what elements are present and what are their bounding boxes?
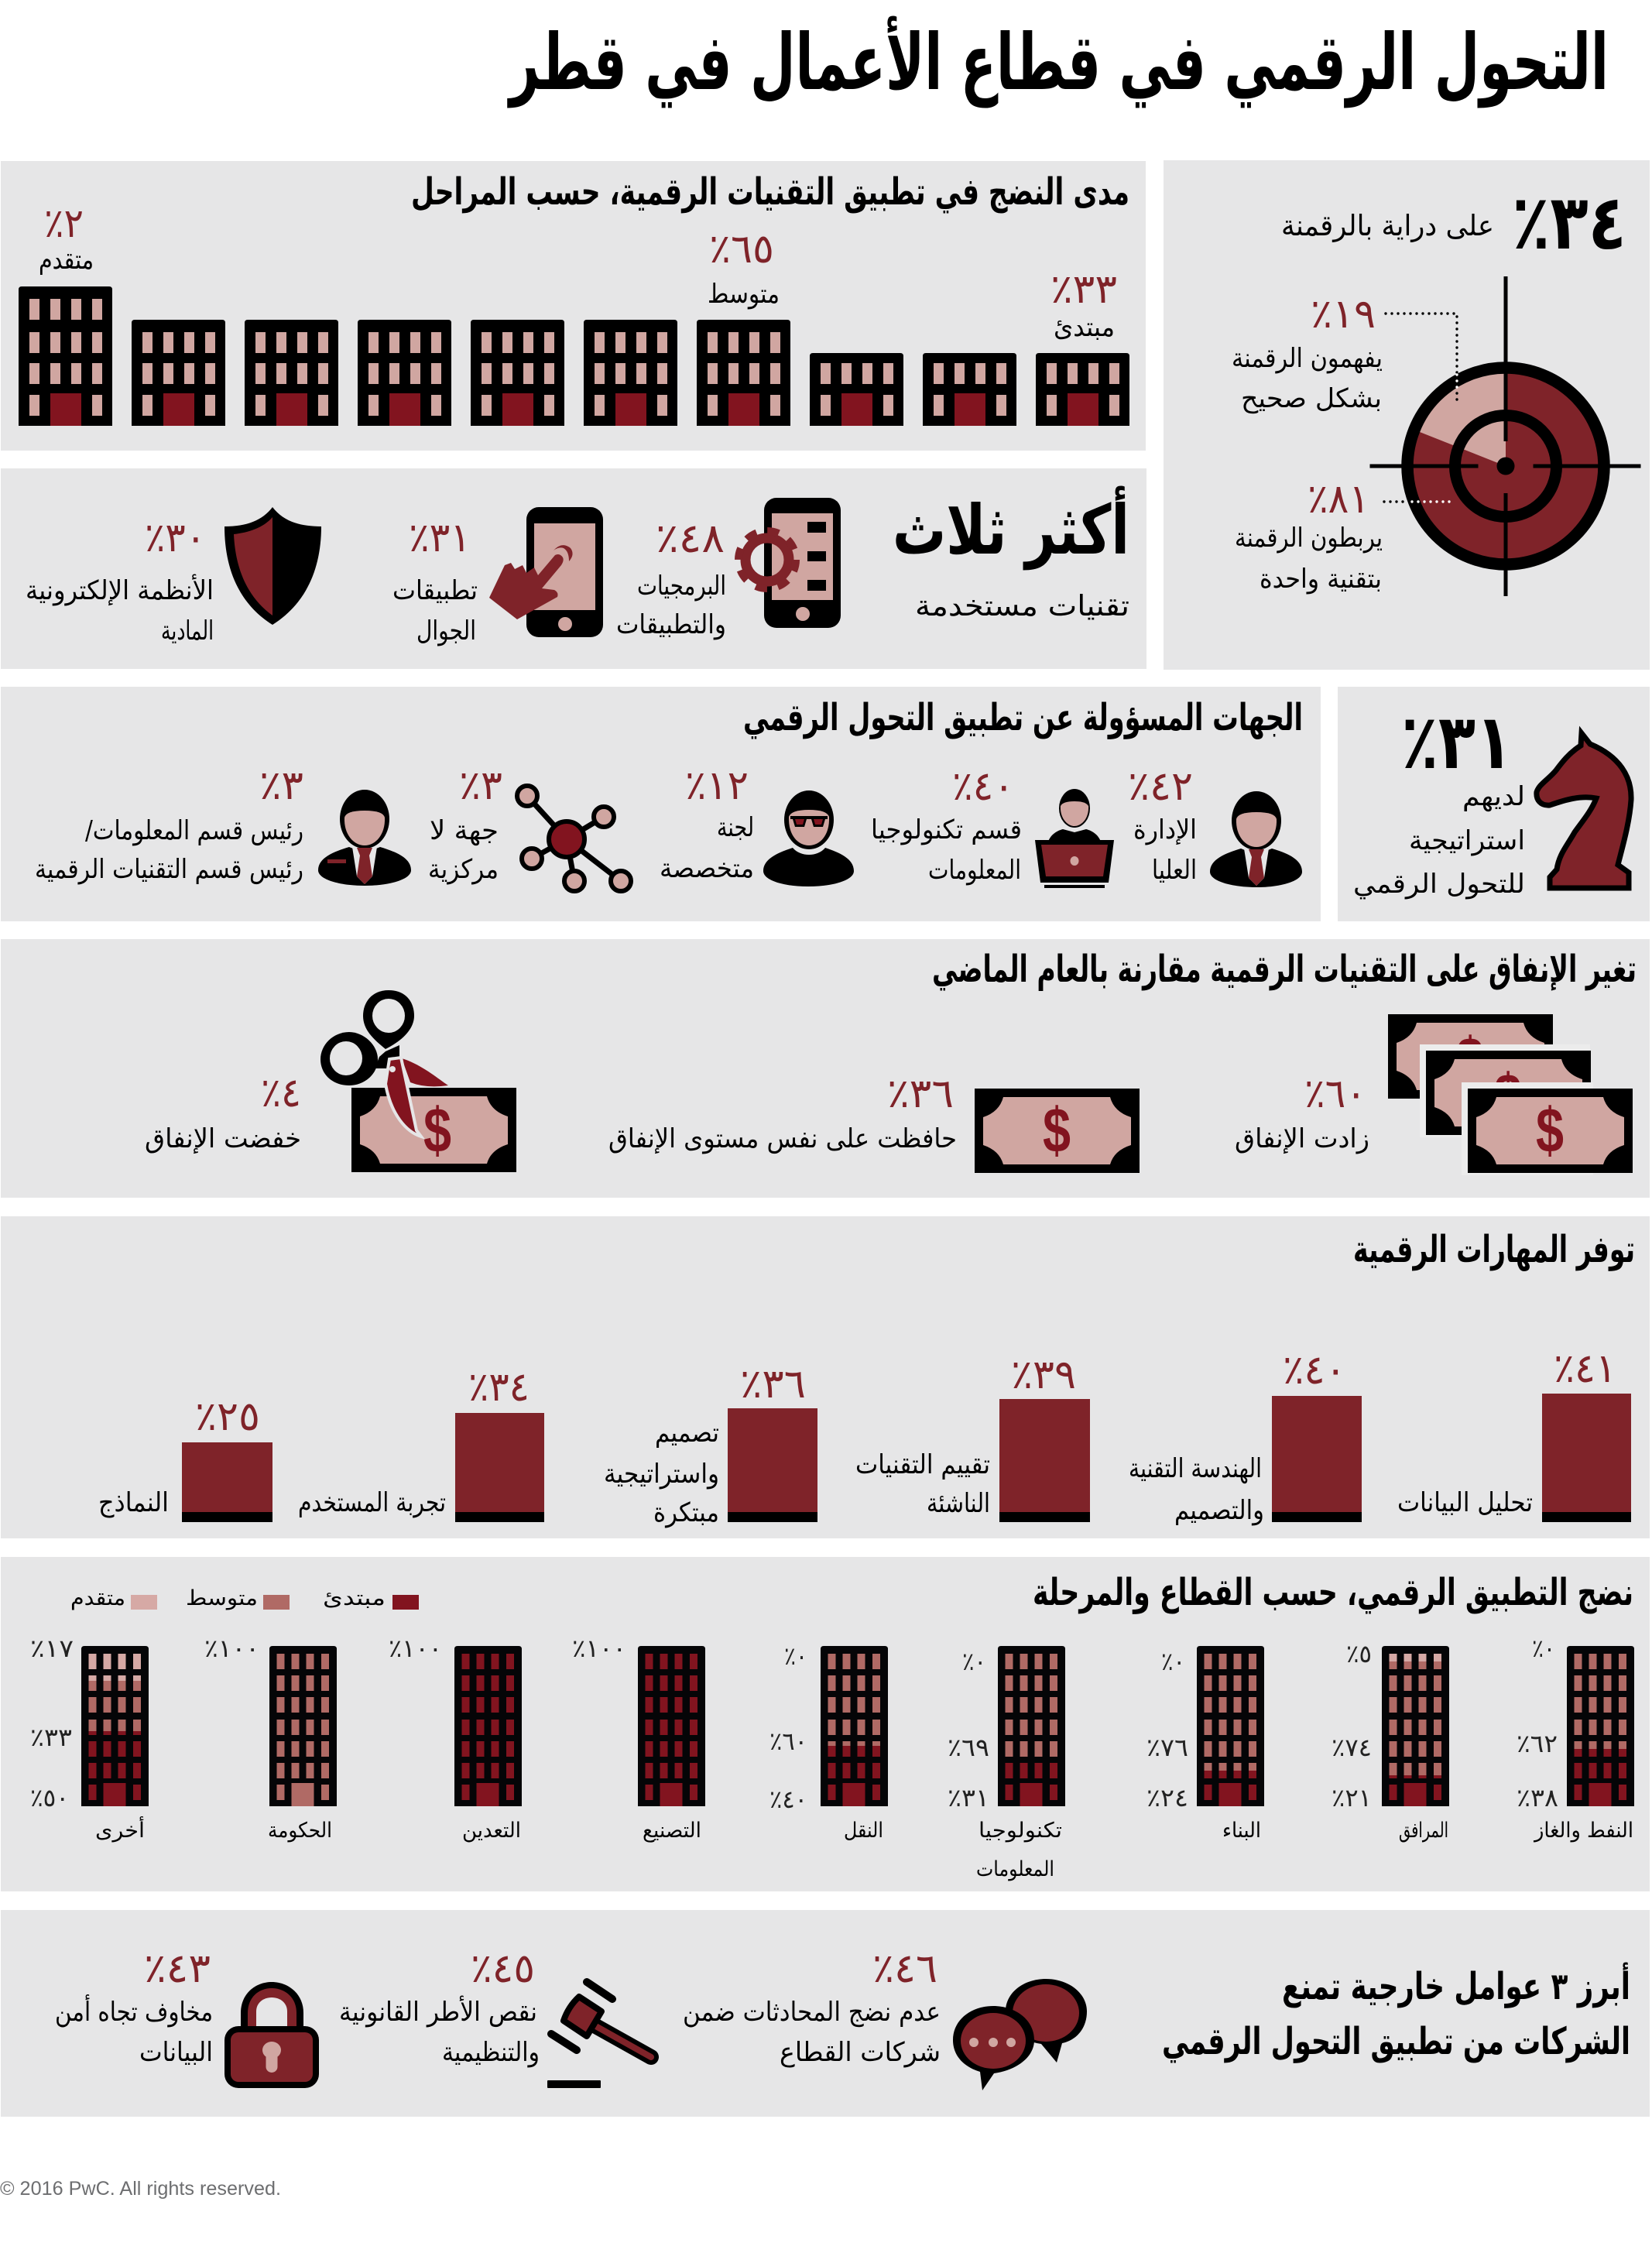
footer copyright: © 2016 PwC. All rights reserved. — [0, 2178, 281, 2200]
sector: government: الحكومة — [268, 1819, 332, 1843]
bar: user experience — [298, 1364, 544, 1522]
stat: 19 percent: يفهمون الرقمنة — [1232, 343, 1383, 374]
legend: متقدم — [70, 1586, 125, 1610]
stat: advanced: ٢٪ — [44, 201, 84, 247]
stat: IT department: ٤٠٪ — [952, 763, 1014, 810]
stat: immature sector conversations: عدم نضج المحادثات ضمن — [683, 1997, 941, 2028]
icon: scissors cutting money — [320, 990, 516, 1172]
stat: immature sector conversations: ٤٦٪ — [872, 1946, 937, 1992]
sector: transport — [769, 1641, 888, 1843]
icon: person with laptop — [1035, 789, 1114, 888]
stat: lack of legal frameworks: نقص الأطر القانونية — [339, 1995, 537, 2028]
bar: emerging tech assessment: تقييم التقنيات — [855, 1449, 990, 1480]
sector: other: ٣٣٪ — [30, 1723, 72, 1752]
stat: top management: العليا — [1152, 855, 1197, 886]
stat: decentralised: مركزية — [428, 854, 499, 885]
sector: utilities: المرافق — [1399, 1819, 1448, 1843]
icon: stacked money: $ — [1494, 1061, 1522, 1132]
stat: beginner: مبتدئ — [1054, 312, 1115, 343]
sector: oil and gas: ٣٨٪ — [1517, 1783, 1558, 1812]
text: have a strategy: للتحول الرقمي — [1353, 869, 1525, 900]
stat: specialized committee: متخصصة — [660, 853, 754, 884]
text: have a strategy: استراتيجية — [1409, 825, 1525, 856]
stat: increased spending: زادت الإنفاق — [1235, 1123, 1369, 1154]
stat: increased spending: ٦٠٪ — [1304, 1071, 1366, 1117]
panel: digital skills — [1, 1216, 1650, 1538]
sector: construction: البناء — [1222, 1819, 1261, 1843]
heading: maturity by stage: مدى النضج في تطبيق التقنيات الرقمية، حسب المراحل — [411, 170, 1129, 214]
stat: 19 percent: بشكل صحيح — [1241, 383, 1382, 414]
stat: decentralised — [428, 763, 502, 885]
sector: mining — [389, 1634, 522, 1843]
stat: 81 percent: يربطون الرقمنة — [1235, 523, 1383, 554]
bar: emerging tech assessment — [855, 1352, 1090, 1522]
stat: maintained spending: حافظت على نفس مستوى الإنفاق — [608, 1123, 957, 1154]
bar: engineering and design: الهندسة التقنية — [1129, 1453, 1262, 1484]
stat: intermediate: ٦٥٪ — [709, 226, 774, 273]
sector: other: أخرى — [95, 1816, 145, 1843]
building: advanced — [19, 286, 112, 426]
heading: top three: أكثر ثلاث — [893, 485, 1129, 570]
stat: CIO / CDO: رئيس قسم المعلومات/ — [85, 815, 303, 846]
icon: money — [975, 1089, 1140, 1173]
stat: specialized committee — [660, 763, 754, 884]
bar: data analysis — [1397, 1346, 1631, 1522]
stat: 19 percent — [1232, 291, 1383, 414]
bar: innovative design and strategy: مبتكرة — [653, 1497, 719, 1528]
icon: scissors cutting money: $ — [423, 1096, 451, 1166]
stat: top management: ٤٢٪ — [1128, 763, 1193, 810]
stat: mobile apps: الجوال — [416, 616, 476, 646]
stat: beginner: ٣٣٪ — [1050, 266, 1117, 313]
stat: software and applications: البرمجيات — [637, 571, 726, 602]
bar: engineering and design: والتصميم — [1174, 1495, 1264, 1526]
heading: external barriers: أبرز ٣ عوامل خارجية تمنع — [1282, 1962, 1630, 2008]
stat: software and applications: ٤٨٪ — [656, 516, 725, 562]
heading: responsible parties: الجهات المسؤولة عن تطبيق التحول الرقمي — [743, 696, 1303, 739]
chart: target pie — [1370, 276, 1641, 596]
stat: top management — [1128, 763, 1197, 886]
building row: beginner — [810, 353, 1129, 426]
callout lines — [1384, 314, 1457, 502]
sector: transport: ٠٪ — [784, 1641, 807, 1671]
icon: speech bubbles — [953, 1979, 1087, 2090]
stat: IT department: المعلومات — [928, 855, 1021, 886]
sector: construction — [1146, 1646, 1264, 1843]
sector: oil and gas — [1517, 1634, 1634, 1843]
bar: innovative design and strategy: واستراتيجية — [604, 1459, 719, 1490]
icon: CIO manager — [318, 790, 411, 886]
stat: maintained spending — [608, 1071, 957, 1154]
sector: oil and gas: ٦٢٪ — [1517, 1729, 1558, 1758]
icon: chess knight — [1537, 733, 1631, 888]
stat: intermediate: متوسط — [708, 279, 780, 310]
stat: decentralised: جهة لا — [430, 815, 499, 846]
sector: information technology: المعلومات — [976, 1857, 1054, 1881]
legend: متوسط — [186, 1586, 258, 1610]
stat: physical electronic systems: ٣٠٪ — [145, 515, 206, 561]
sector: utilities — [1332, 1639, 1449, 1843]
stat: advanced — [39, 201, 94, 276]
stat: physical electronic systems: المادية — [161, 616, 214, 646]
legend: مبتدئ — [323, 1586, 386, 1610]
stat: specialized committee: لجنة — [717, 812, 754, 843]
sector: oil and gas: ٠٪ — [1532, 1634, 1555, 1663]
sector: oil and gas: النفط والغاز — [1533, 1819, 1633, 1843]
icon: money: $ — [1043, 1096, 1071, 1166]
stat: mobile apps: ٣١٪ — [409, 515, 471, 561]
stat: reduced spending: ٤٪ — [261, 1070, 301, 1116]
stat: IT department: قسم تكنولوجيا — [871, 814, 1022, 845]
bar: emerging tech assessment: الناشئة — [927, 1488, 990, 1519]
stat: decentralised: ٣٪ — [459, 763, 502, 809]
bar: innovative design and strategy — [604, 1361, 817, 1528]
bar: user experience: تجربة المستخدم — [298, 1487, 446, 1518]
big stat: 34 percent: ٣٤٪ — [1512, 179, 1626, 267]
sector: information technology: ٣١٪ — [948, 1783, 989, 1812]
panel: digital awareness target — [1164, 160, 1650, 670]
stat: lack of legal frameworks: والتنظيمية — [442, 2037, 540, 2068]
sector: utilities: ٧٤٪ — [1332, 1733, 1372, 1762]
sector: other: ١٧٪ — [30, 1634, 74, 1663]
panel: external barriers — [1, 1910, 1650, 2117]
stat: mobile apps — [392, 515, 478, 646]
stat: reduced spending — [145, 1070, 301, 1154]
sector: utilities: ٥٪ — [1346, 1639, 1372, 1668]
sector: other: ٥٠٪ — [30, 1783, 69, 1812]
stat: CIO / CDO — [35, 763, 303, 885]
sector: government: ١٠٠٪ — [204, 1634, 259, 1663]
stat: data security concerns — [55, 1946, 213, 2068]
icon: phone with hand — [489, 507, 603, 637]
sector: manufacturing — [572, 1634, 705, 1843]
bar: innovative design and strategy: ٣٦٪ — [740, 1361, 806, 1408]
bar: prototyping: النماذج — [98, 1487, 169, 1518]
sector: information technology: تكنولوجيا — [979, 1819, 1062, 1843]
stat: CIO / CDO: ٣٪ — [259, 763, 303, 809]
stat: lack of legal frameworks — [339, 1946, 540, 2068]
panel: digital strategy — [1338, 687, 1650, 921]
stat: immature sector conversations: شركات القطاع — [780, 2037, 941, 2068]
sector: transport: ٦٠٪ — [769, 1727, 807, 1756]
heading: external barriers — [1162, 1962, 1630, 2063]
sector: transport: النقل — [844, 1819, 883, 1843]
sector: information technology — [948, 1646, 1065, 1881]
text: have a strategy — [1353, 781, 1525, 900]
stat: intermediate — [708, 226, 780, 310]
stat: data security concerns: ٤٣٪ — [144, 1946, 211, 1992]
bar: data analysis: تحليل البيانات — [1397, 1487, 1533, 1518]
stat: 81 percent: ٨١٪ — [1308, 476, 1369, 523]
sector: information technology: ٦٩٪ — [948, 1733, 989, 1762]
sector: construction: ٠٪ — [1161, 1647, 1185, 1676]
bar: user experience: ٣٤٪ — [468, 1364, 530, 1411]
sector: mining: ١٠٠٪ — [389, 1634, 442, 1663]
icon: person with sunglasses — [763, 790, 854, 886]
bar: data analysis: ٤١٪ — [1554, 1346, 1616, 1392]
sector: transport: ٤٠٪ — [769, 1785, 807, 1814]
stat: software and applications: والتطبيقات — [616, 609, 726, 640]
stat: 81 percent — [1235, 476, 1383, 595]
text: have a strategy: لديهم — [1462, 781, 1525, 812]
stat: maintained spending: ٣٦٪ — [887, 1071, 954, 1117]
stat: beginner — [1050, 266, 1117, 343]
icon: phone with gear — [739, 498, 841, 628]
bar: prototyping: ٢٥٪ — [195, 1394, 260, 1440]
stat: advanced: متقدم — [39, 245, 94, 276]
bar: engineering and design: ٤٠٪ — [1283, 1347, 1346, 1394]
panel: responsible parties — [1, 687, 1321, 921]
stat: software and applications — [616, 516, 726, 640]
building row: intermediate — [132, 320, 790, 426]
stat: lack of legal frameworks: ٤٥٪ — [471, 1946, 535, 1992]
stat: CIO / CDO: رئيس قسم التقنيات الرقمية — [35, 854, 303, 885]
icon: padlock — [224, 1982, 319, 2088]
stat: top management: الإدارة — [1133, 814, 1197, 845]
stat: physical electronic systems — [26, 515, 214, 646]
stat: mobile apps: تطبيقات — [392, 575, 478, 606]
icon: gavel — [547, 1982, 651, 2088]
panel: top three technologies — [1, 468, 1146, 669]
sector: other — [30, 1634, 149, 1843]
sector: utilities: ٢١٪ — [1332, 1783, 1372, 1812]
stat: reduced spending: خفضت الإنفاق — [145, 1123, 301, 1154]
stat: increased spending — [1235, 1071, 1369, 1154]
sector: manufacturing: ١٠٠٪ — [572, 1634, 626, 1663]
stat: immature sector conversations — [683, 1946, 941, 2068]
stat: 19 percent: ١٩٪ — [1311, 291, 1376, 338]
sector: construction: ٢٤٪ — [1146, 1783, 1188, 1812]
sector: mining: التعدين — [462, 1819, 521, 1843]
stat: data security concerns: البيانات — [139, 2037, 213, 2068]
big stat: 31 percent: ٣١٪ — [1401, 698, 1513, 787]
icon: top manager — [1210, 791, 1302, 887]
sector: construction: ٧٦٪ — [1146, 1733, 1188, 1762]
stat: 81 percent: بتقنية واحدة — [1260, 564, 1382, 595]
icon: network — [517, 786, 631, 891]
stat: IT department — [871, 763, 1022, 886]
sector: government — [204, 1634, 337, 1843]
bar: emerging tech assessment: ٣٩٪ — [1011, 1352, 1076, 1398]
icon: stacked money: $ — [1456, 1025, 1484, 1096]
icon: shield — [224, 507, 321, 625]
panel: maturity by stage — [1, 161, 1146, 451]
bar: prototyping — [98, 1394, 272, 1522]
stat: data security concerns: مخاوف تجاه أمن — [55, 1994, 213, 2028]
legend — [70, 1586, 419, 1610]
text: aware of digital: على دراية بالرقمنة — [1281, 209, 1494, 242]
text: technologies used: تقنيات مستخدمة — [915, 589, 1129, 622]
bar: innovative design and strategy: تصميم — [655, 1418, 719, 1449]
bar: engineering and design — [1129, 1347, 1362, 1526]
sector: manufacturing: التصنيع — [643, 1819, 701, 1843]
sector: information technology: ٠٪ — [962, 1647, 986, 1676]
panel: maturity by sector — [1, 1557, 1650, 1891]
icon: stacked money — [1388, 1014, 1633, 1175]
stat: physical electronic systems: الأنظمة الإلكترونية — [26, 574, 214, 606]
stat: specialized committee: ١٢٪ — [685, 763, 749, 809]
icon: stacked money: $ — [1536, 1096, 1564, 1166]
panel: spending change — [1, 939, 1650, 1198]
